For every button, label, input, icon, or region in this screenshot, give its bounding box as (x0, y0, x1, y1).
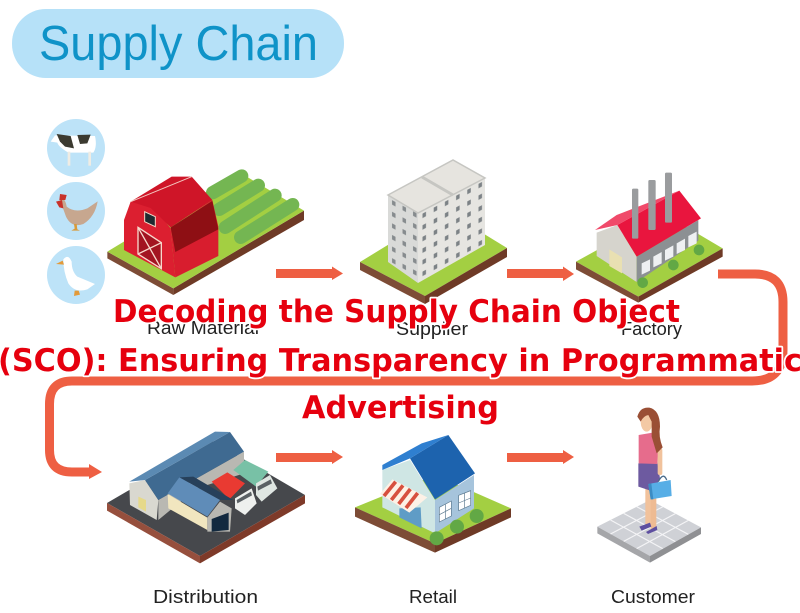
Supplier: apartment building (360, 160, 507, 304)
front building (168, 477, 233, 532)
factory building (595, 191, 701, 282)
platform (576, 213, 723, 303)
handbag (648, 476, 672, 499)
label: Factory: Factory (621, 319, 682, 339)
platform sides (107, 177, 304, 295)
title overlay: (SCO): Ensuring Transparency in Programmatic (0, 343, 800, 379)
tiled floor (597, 500, 701, 563)
title overlay (0, 294, 800, 426)
back building (129, 432, 244, 520)
title overlay: Advertising (302, 390, 499, 426)
platform (355, 475, 511, 553)
label: Retail: Retail (409, 587, 457, 607)
bushes (637, 245, 704, 288)
arrow: factory looping back to distribution (50, 274, 783, 479)
label: Customer: Customer (611, 587, 695, 607)
arrow: supplier to factory (507, 266, 574, 281)
building walls and roof (388, 160, 485, 283)
arrow: raw material to supplier (276, 266, 343, 280)
icon: goose in circle (47, 246, 105, 304)
shop walls (382, 460, 474, 533)
barn (124, 177, 218, 277)
awning (380, 479, 427, 513)
platform (107, 441, 305, 563)
windows (439, 491, 471, 522)
Distribution warehouse (107, 432, 305, 563)
header pill: Supply Chain: Supply Chain (39, 17, 318, 71)
arrow: retail to customer (507, 450, 574, 464)
header pill: Supply Chain (12, 9, 344, 78)
label: Distribution: Distribution (153, 587, 258, 607)
label: Raw Material: Raw Material (147, 318, 259, 338)
Factory (576, 173, 723, 303)
Customer (597, 408, 701, 563)
crop rows (213, 176, 293, 237)
trucks (212, 460, 277, 515)
arrow: distribution to retail (276, 450, 343, 464)
Retail shop (355, 435, 511, 553)
title overlay: Decoding the Supply Chain Object (113, 294, 680, 330)
woman (637, 408, 663, 534)
roof (382, 435, 475, 499)
icon: chicken in circle (47, 182, 105, 240)
Raw Material: barn and field (107, 176, 304, 295)
chimneys (632, 173, 672, 239)
label: Supplier: Supplier (396, 319, 468, 339)
icon: cow in circle (47, 119, 105, 177)
platform (360, 210, 507, 304)
bushes (430, 509, 484, 545)
